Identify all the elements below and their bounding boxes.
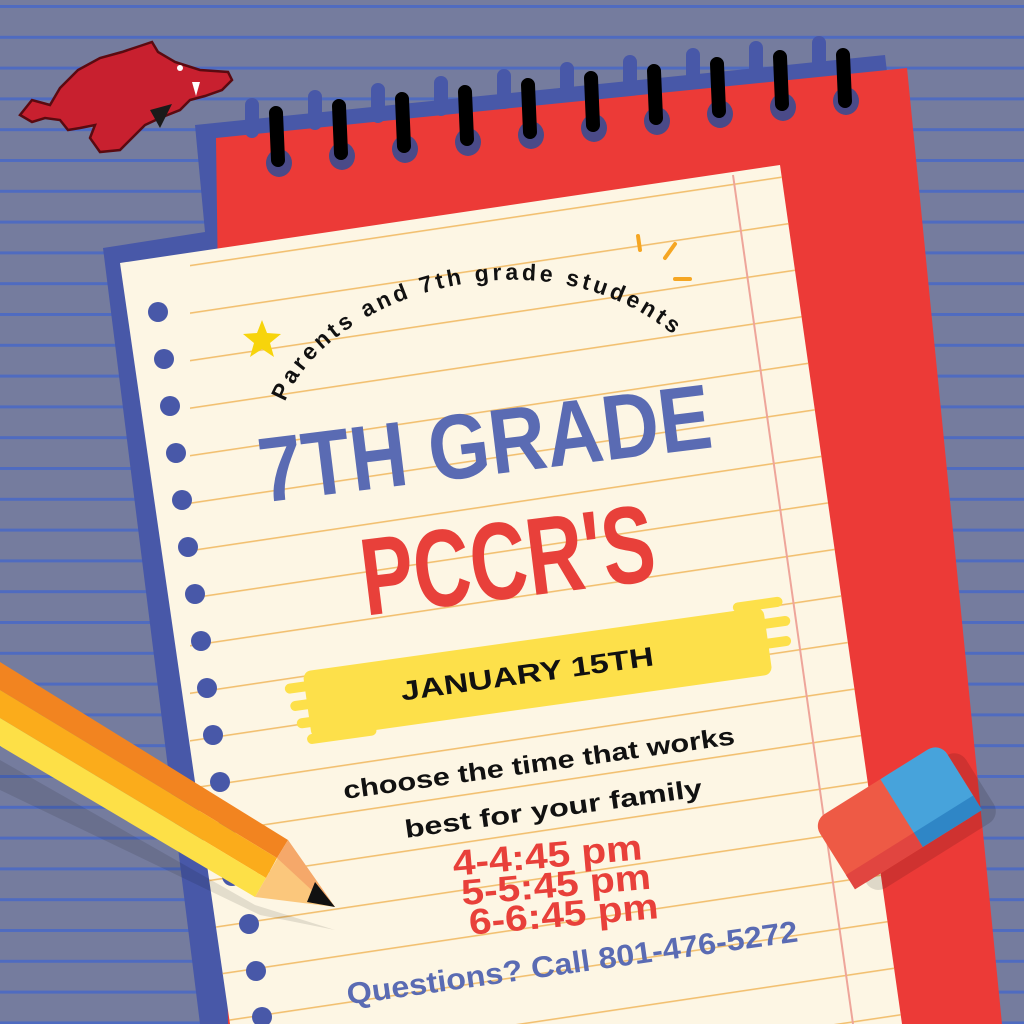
icon: razorback hog logo: [20, 42, 232, 152]
title: PCCR'S: PCCR'S: [354, 481, 662, 639]
text: time slots: [451, 825, 660, 944]
text: instructions: choose the time that works: [341, 722, 736, 805]
icon: eraser: [813, 735, 1001, 902]
text: time slots: 5-5:45 pm: [460, 856, 652, 913]
text: instructions: best for your family: [403, 774, 704, 844]
arc subtitle: Parents and 7th grade students: [271, 264, 678, 400]
text: time slots: 4-4:45 pm: [451, 826, 644, 884]
date text: JANUARY 15TH: [399, 641, 655, 707]
notebook red page: [216, 68, 1002, 1024]
text: contact: Questions? Call 801-476-5272: [345, 915, 800, 1011]
spiral binding: [245, 36, 859, 177]
icon: pencil: [0, 662, 335, 930]
text: instructions: [341, 722, 743, 852]
icon: yellow star: [243, 320, 281, 357]
icon: sparkle lines: [638, 236, 690, 279]
text: time slots: 6-6:45 pm: [467, 885, 660, 943]
panel: paper sheet: [120, 165, 902, 1024]
yellow highlight with date: [282, 596, 798, 747]
title: 7TH GRADE: 7TH GRADE: [253, 366, 717, 522]
